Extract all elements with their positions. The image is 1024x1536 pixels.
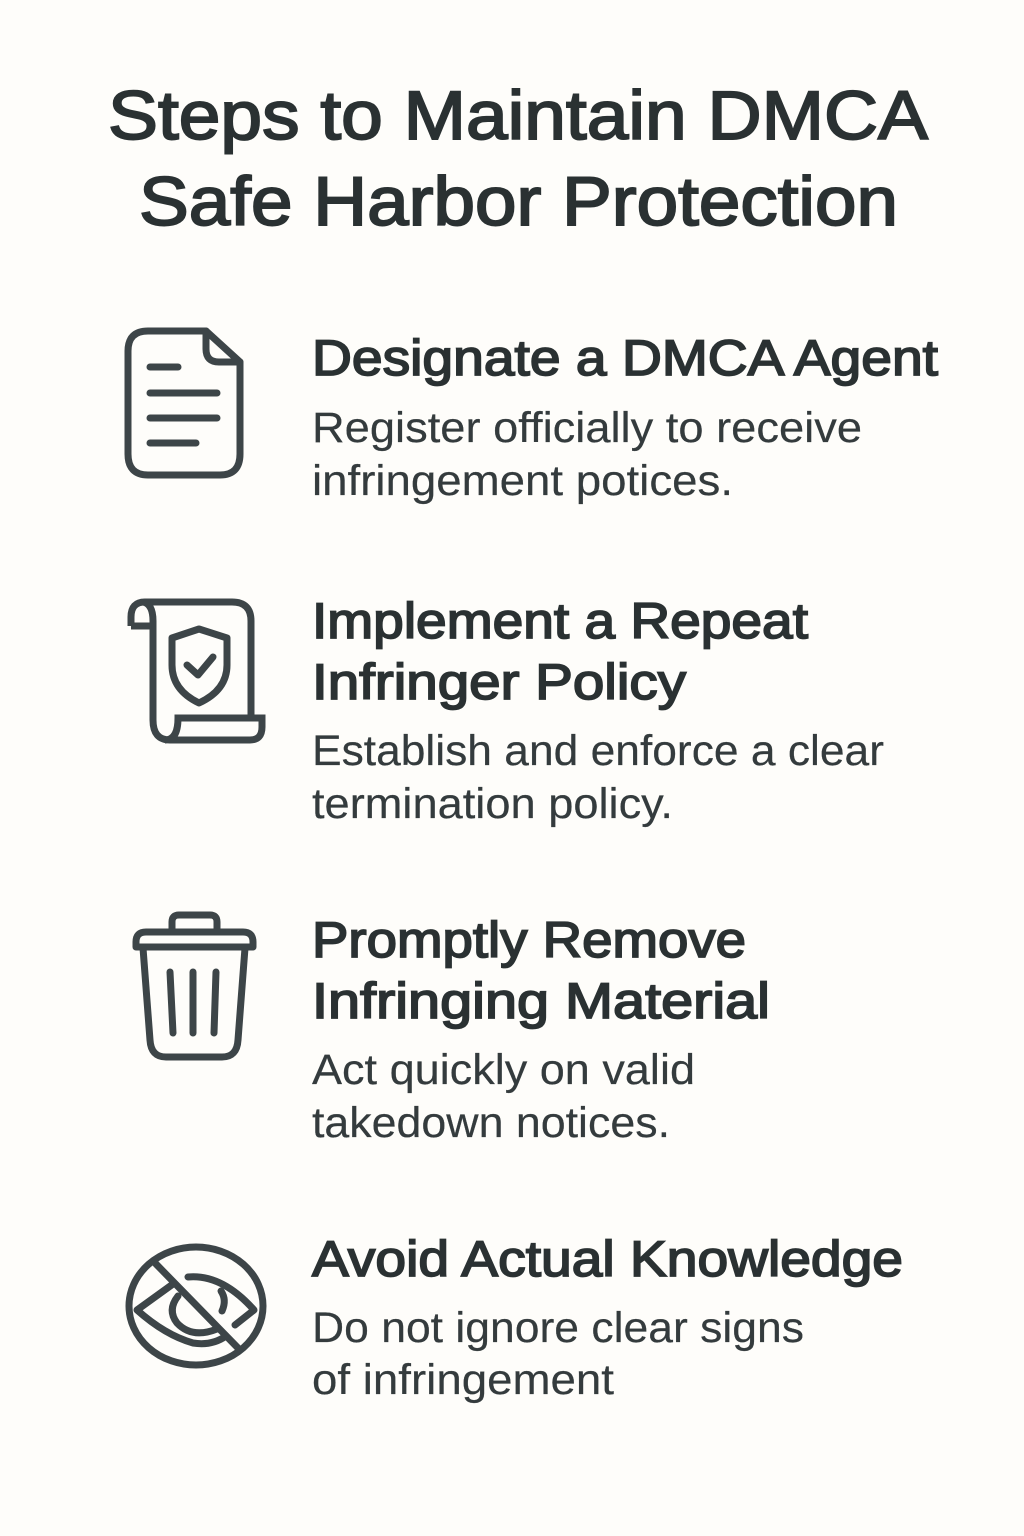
icon: trash can bbox=[136, 915, 253, 1057]
icon: crossed-out eye bbox=[129, 1247, 263, 1365]
title: Steps to Maintain DMCA bbox=[108, 77, 928, 154]
icon: scroll with shield bbox=[131, 602, 262, 740]
panel: designate a DMCA agent bbox=[128, 330, 938, 505]
panel: repeat infringer policy bbox=[131, 593, 884, 828]
text: avoid knowledge description bbox=[312, 1304, 804, 1404]
text: avoid knowledge description: Do not ignore clear signs bbox=[312, 1304, 804, 1352]
text: designate description: infringement potices. bbox=[312, 457, 733, 505]
heading: designate: Designate a DMCA Agent bbox=[312, 330, 938, 386]
icon: document bbox=[128, 331, 240, 475]
heading: remove infringing: Infringing Material bbox=[312, 973, 770, 1029]
text: avoid knowledge description: of infringement bbox=[312, 1356, 614, 1404]
text: repeat infringer description: Establish and enforce a clear bbox=[312, 727, 884, 775]
text: remove infringing description: Act quickly on valid bbox=[312, 1046, 695, 1094]
panel: remove infringing material bbox=[136, 912, 770, 1147]
text: designate description bbox=[312, 404, 862, 505]
heading: remove infringing bbox=[312, 912, 770, 1029]
text: repeat infringer description bbox=[312, 727, 884, 828]
heading: avoid knowledge: Avoid Actual Knowledge bbox=[312, 1231, 903, 1287]
text: repeat infringer description: termination policy. bbox=[312, 780, 673, 828]
heading: repeat infringer: Infringer Policy bbox=[312, 654, 686, 710]
panel: avoid actual knowledge bbox=[129, 1231, 903, 1404]
text: remove infringing description bbox=[312, 1046, 695, 1147]
heading: remove infringing: Promptly Remove bbox=[312, 912, 746, 968]
heading: repeat infringer bbox=[312, 593, 808, 710]
text: designate description: Register officially to receive bbox=[312, 404, 862, 452]
heading: repeat infringer: Implement a Repeat bbox=[312, 593, 808, 649]
text: remove infringing description: takedown notices. bbox=[312, 1099, 670, 1147]
title: Safe Harbor Protection bbox=[139, 163, 898, 240]
title bbox=[108, 77, 928, 240]
